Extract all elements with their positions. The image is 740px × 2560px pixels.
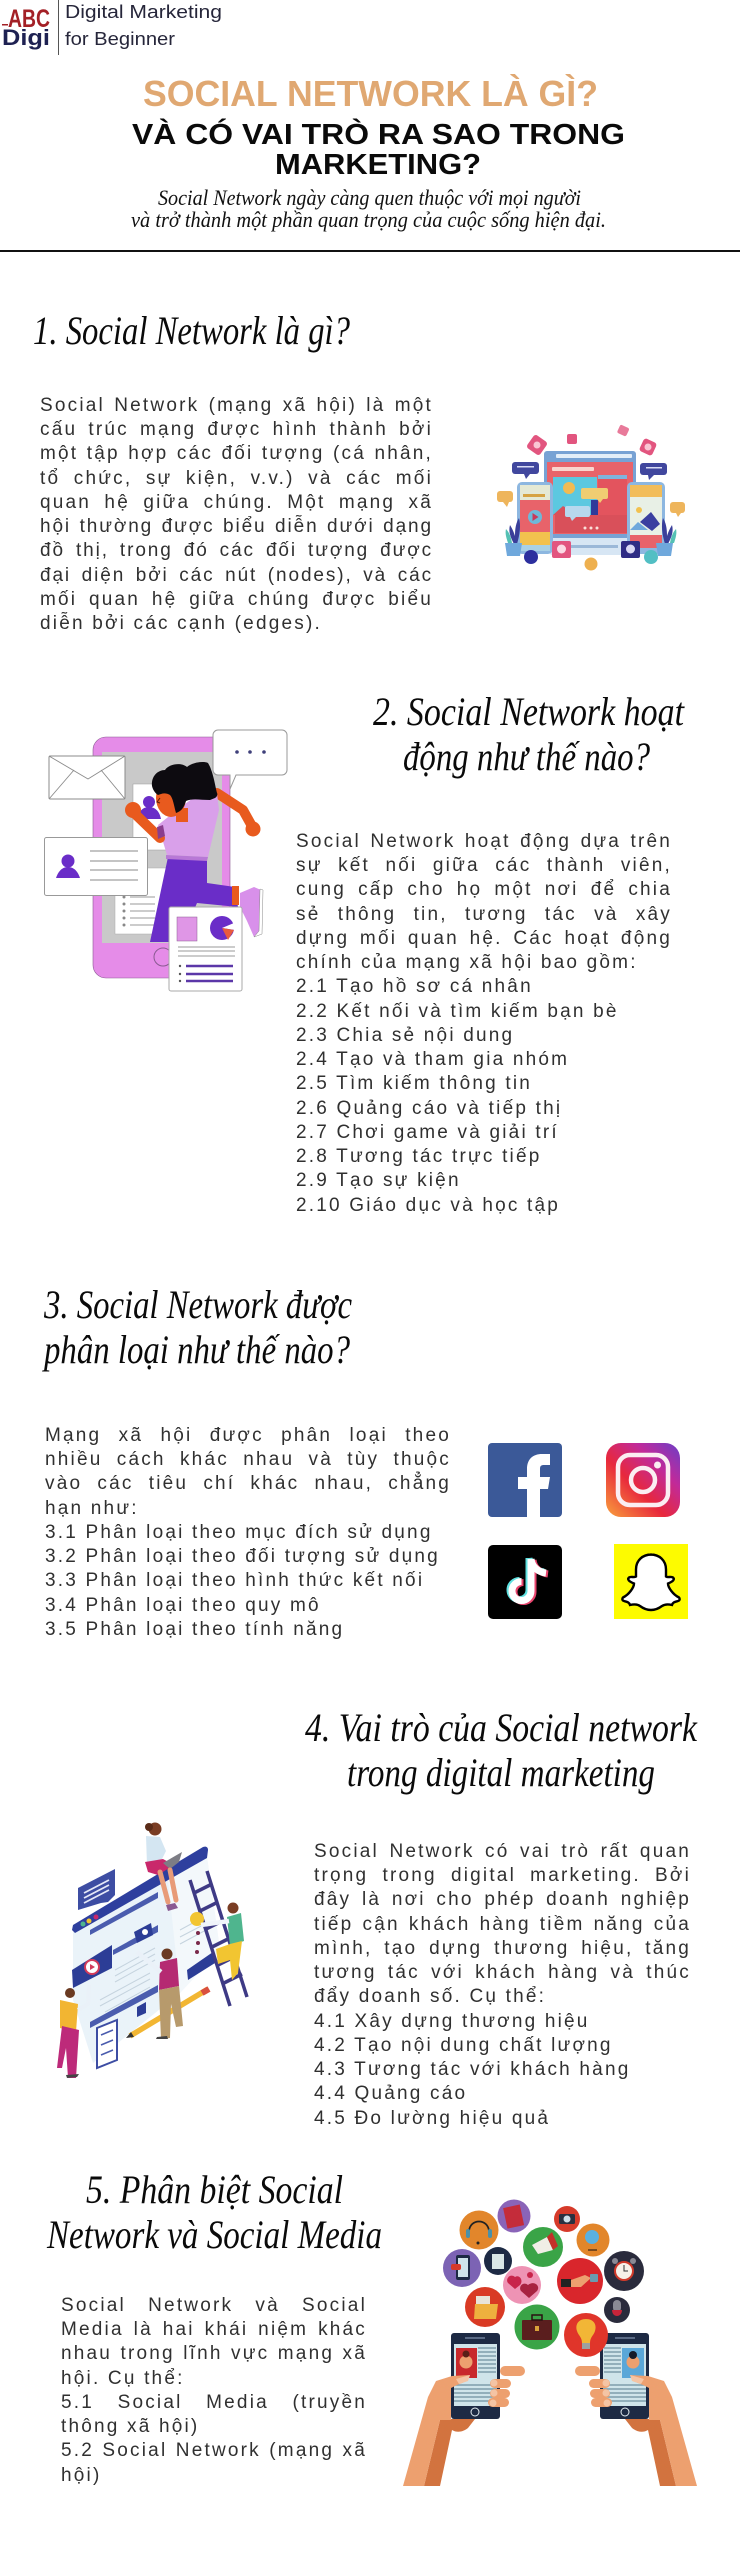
bubble: phone (443, 2249, 481, 2287)
text block 1: tổ chức, sự kiện, v.v.) và các mối (40, 468, 433, 489)
bubble: alarm clock (604, 2251, 644, 2291)
text block 1 (40, 395, 433, 634)
text block 4 (314, 1841, 691, 2129)
text block 2: 2.9 Tạo sự kiện (296, 1170, 461, 1191)
text block 2: 2.2 Kết nối và tìm kiếm bạn bè (296, 1001, 619, 1022)
bubble: camera (554, 2206, 580, 2232)
text block 4: 4.3 Tương tác với khách hàng (314, 2059, 630, 2080)
text block 3: hạn như: (45, 1498, 139, 1519)
heading 5 (46, 2167, 382, 2257)
text block 2: 2.1 Tạo hồ sơ cá nhân (296, 976, 533, 997)
text block 1: một tập hợp các đối tượng (cá nhân, (40, 443, 433, 464)
illustration: hands holding phones with app bubbles (403, 2200, 697, 2486)
text block 4: đẩy doanh số. Cụ thể: (314, 1986, 546, 2007)
text block 4: 4.5 Đo lường hiệu quả (314, 2108, 550, 2129)
monitor (544, 451, 636, 555)
logo: ABC Digi: for Beginner (65, 29, 175, 49)
text block 3: 3.5 Phân loại theo tính năng (45, 1619, 344, 1640)
app bubbles (443, 2200, 644, 2357)
text block 3: vào các tiêu chí khác nhau, chẳng (45, 1473, 451, 1494)
bubble: hearts (503, 2266, 541, 2304)
icon: facebook (488, 1443, 562, 1517)
pencil (126, 1989, 209, 2038)
profile photo card (133, 784, 191, 850)
text block 5: hội. Cụ thể: (61, 2368, 185, 2389)
text block 2 (296, 831, 672, 1216)
text block 2: sự kết nối giữa các thành viên, (296, 855, 672, 876)
icon: instagram (606, 1443, 680, 1517)
heading 2 (373, 690, 685, 779)
bubble: folder (465, 2287, 505, 2327)
bubble: microphone (604, 2297, 630, 2323)
text block 4: mình, tạo dựng thương hiệu, tăng (314, 1938, 691, 1959)
text block 5: hội) (61, 2465, 101, 2486)
logo: ABC Digi (2, 0, 222, 55)
subtitle (131, 185, 606, 232)
yellow bubbles (497, 491, 685, 517)
profile card (44, 838, 148, 896)
icon: tiktok (488, 1545, 562, 1619)
text block 5: Media là hai khái niệm khác (61, 2319, 367, 2340)
text block 2: chính của mạng xã hội bao gồm: (296, 952, 638, 973)
text block 3: 3.2 Phân loại theo đối tượng sử dụng (45, 1546, 440, 1567)
text block 1: cấu trúc mạng được hình thành bởi (40, 419, 433, 440)
text block 1: Social Network (mạng xã hội) là một (40, 395, 433, 416)
left hand and phone (403, 2333, 525, 2486)
right hand and phone (575, 2333, 697, 2486)
subtitle: Social Network ngày càng quen thuộc với mọi người (158, 185, 581, 210)
text block 2: 2.5 Tìm kiếm thông tin (296, 1073, 532, 1094)
emoji and dots (190, 1912, 204, 1954)
right phone (627, 482, 665, 554)
text block 4: 4.4 Quảng cáo (314, 2083, 467, 2104)
heading 5: 5. Phân biệt Social (86, 2167, 343, 2212)
text block 2: 2.7 Chơi game và giải trí (296, 1122, 559, 1143)
title: VÀ CÓ VAI TRÒ RA SAO TRONG (132, 117, 625, 151)
logo: ABC Digi: Digi (2, 25, 50, 50)
text block 5: thông xã hội) (61, 2416, 199, 2437)
title: MARKETING? (275, 149, 481, 181)
heading 4 (305, 1705, 698, 1795)
text block 4: tương tác với khách hàng và thúc (314, 1962, 691, 1983)
section 1 (33, 310, 685, 634)
title (132, 73, 625, 181)
ladder (190, 1871, 247, 2006)
text block 5: nhau trong lĩnh vực mạng xã (61, 2343, 367, 2364)
text block 5 (61, 2295, 367, 2486)
text block 2: dựng mối quan hệ. Các hoạt động (296, 928, 672, 949)
heart badges and balls (524, 541, 658, 570)
text block 1: mối quan hệ giữa chúng được biểu (40, 589, 433, 610)
section 4 (57, 1705, 698, 2129)
floating hearts (526, 424, 657, 456)
bubble: globe (576, 2224, 610, 2256)
left phone (517, 482, 553, 554)
illustration: woman running out of a phone (44, 730, 288, 992)
bubble: megaphone (523, 2227, 563, 2267)
text block 3: 3.1 Phân loại theo mục đích sử dụng (45, 1522, 433, 1543)
text block 4: 4.2 Tạo nội dung chất lượng (314, 2035, 613, 2056)
section 5 (46, 2167, 697, 2486)
heading 3 (42, 1285, 352, 1372)
text block 5: 5.2 Social Network (mạng xã (61, 2440, 367, 2461)
title: SOCIAL NETWORK LÀ GÌ? (143, 73, 598, 114)
text block 4: đây là nơi cho phép doanh nghiệp (314, 1889, 691, 1910)
text block 5: 5.1 Social Media (truyền (61, 2392, 367, 2413)
text block 2: Social Network hoạt động dựa trên (296, 831, 672, 852)
bubble: headset (460, 2210, 498, 2250)
text block 2: 2.6 Quảng cáo và tiếp thị (296, 1098, 562, 1119)
text block 2: 2.4 Tạo và tham gia nhóm (296, 1049, 569, 1070)
climber (201, 1902, 244, 1980)
bubble: handshake (557, 2258, 603, 2304)
text block 2: cung cấp cho họ một nơi để chia (296, 879, 672, 900)
logo: ABC Digi: ABC (8, 5, 50, 33)
phone (93, 737, 230, 978)
text block 1: đại diện bởi các nút (nodes), và các (40, 565, 433, 586)
bubble: briefcase (514, 2304, 560, 2350)
woman (125, 762, 263, 942)
text block 3: 3.4 Phân loại theo quy mô (45, 1595, 321, 1616)
text block 3 (45, 1425, 451, 1640)
bubble: notebook (498, 2200, 530, 2232)
text block 1: hội thường được biểu diễn dưới dạng (40, 516, 433, 537)
plants and pots (505, 518, 676, 556)
text block 3: Mạng xã hội được phân loại theo (45, 1425, 451, 1446)
text block 2: 2.8 Tương tác trực tiếp (296, 1146, 542, 1167)
envelope (49, 756, 125, 799)
text block 1: quan hệ giữa chúng. Một mạng xã (40, 492, 433, 513)
icon: snapchat (614, 1544, 688, 1619)
text block 3: nhiều cách khác nhau và tùy thuộc (45, 1449, 451, 1470)
bubble: light bulb (564, 2313, 608, 2357)
text block 4: 4.1 Xây dựng thương hiệu (314, 2011, 590, 2032)
header (0, 0, 740, 252)
text block 5: Social Network và Social (61, 2295, 367, 2316)
list card (115, 868, 167, 934)
text block 3: 3.3 Phân loại theo hình thức kết nối (45, 1570, 424, 1591)
text block 4: trọng trong digital marketing. Bởi (314, 1865, 691, 1886)
text block 1: đồ thị, trong đó các đối tượng được (40, 540, 433, 561)
illustration: screens and social bubbles (497, 424, 685, 570)
logo: ABC Digi: Digital Marketing (65, 2, 222, 22)
man in the centre (137, 1948, 183, 2039)
text block 4: tiếp cận khách hàng tiềm năng của (314, 1914, 691, 1935)
section 2 (44, 690, 685, 1216)
text block 4: Social Network có vai trò rất quan (314, 1841, 691, 1862)
heading 2: động như thế nào? (403, 734, 650, 779)
man on the left (57, 1985, 89, 2078)
text block 2: 2.10 Giáo dục và học tập (296, 1195, 560, 1216)
social logos (488, 1443, 688, 1619)
text block 1: diễn bởi các cạnh (edges). (40, 613, 322, 634)
web page (72, 1847, 220, 2068)
report card (169, 907, 242, 991)
text block 2: 2.3 Chia sẻ nội dung (296, 1025, 514, 1046)
illustration: team building a web page (57, 1822, 249, 2078)
woman sitting on top (145, 1822, 182, 1911)
speech bubble (213, 730, 287, 789)
bubble: document (484, 2247, 512, 2275)
section 3 (42, 1285, 688, 1640)
navy bubbles (512, 462, 667, 480)
text block 2: sẻ thông tin, tương tác và xây (296, 904, 672, 925)
